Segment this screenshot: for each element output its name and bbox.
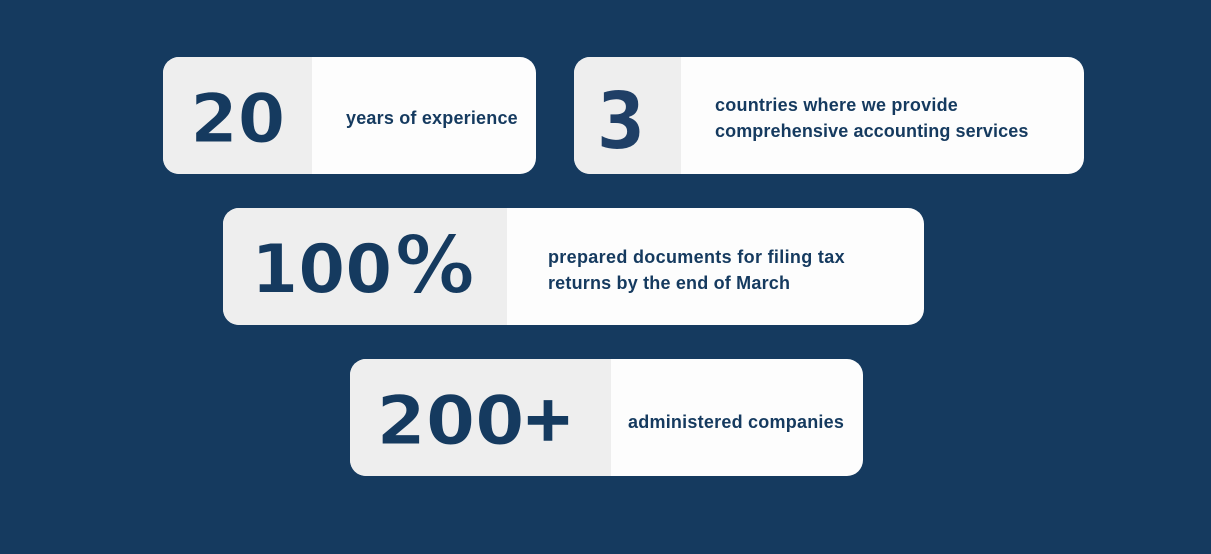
number: 20: 20 (190, 80, 285, 159)
text: prepared documents: prepared documents for filing tax (548, 247, 845, 267)
text: administered companies: administered companies (628, 412, 844, 432)
card: 100% (223, 208, 924, 325)
number: 3: 3 (596, 75, 645, 167)
number: 100% (223, 208, 507, 325)
number: 200+: 200 (376, 382, 524, 460)
number: 3 (574, 57, 681, 174)
number: 100%: 100 (251, 230, 392, 309)
card: 3 countries (574, 57, 1084, 174)
card: 200+ (350, 358, 863, 476)
text: prepared documents: returns by the end of March (548, 273, 790, 293)
text: countries (715, 95, 1028, 141)
number: 100%: % (395, 219, 474, 311)
text: years of experience: years of experience (346, 108, 518, 128)
text: countries: comprehensive accounting services (715, 121, 1028, 141)
text: prepared documents (548, 247, 845, 293)
number: 200+ (350, 358, 611, 476)
number: 20 (163, 57, 312, 174)
number: 200+: + (522, 382, 573, 454)
text: countries: countries where we provide (715, 95, 958, 115)
card: 20 years (163, 57, 536, 174)
